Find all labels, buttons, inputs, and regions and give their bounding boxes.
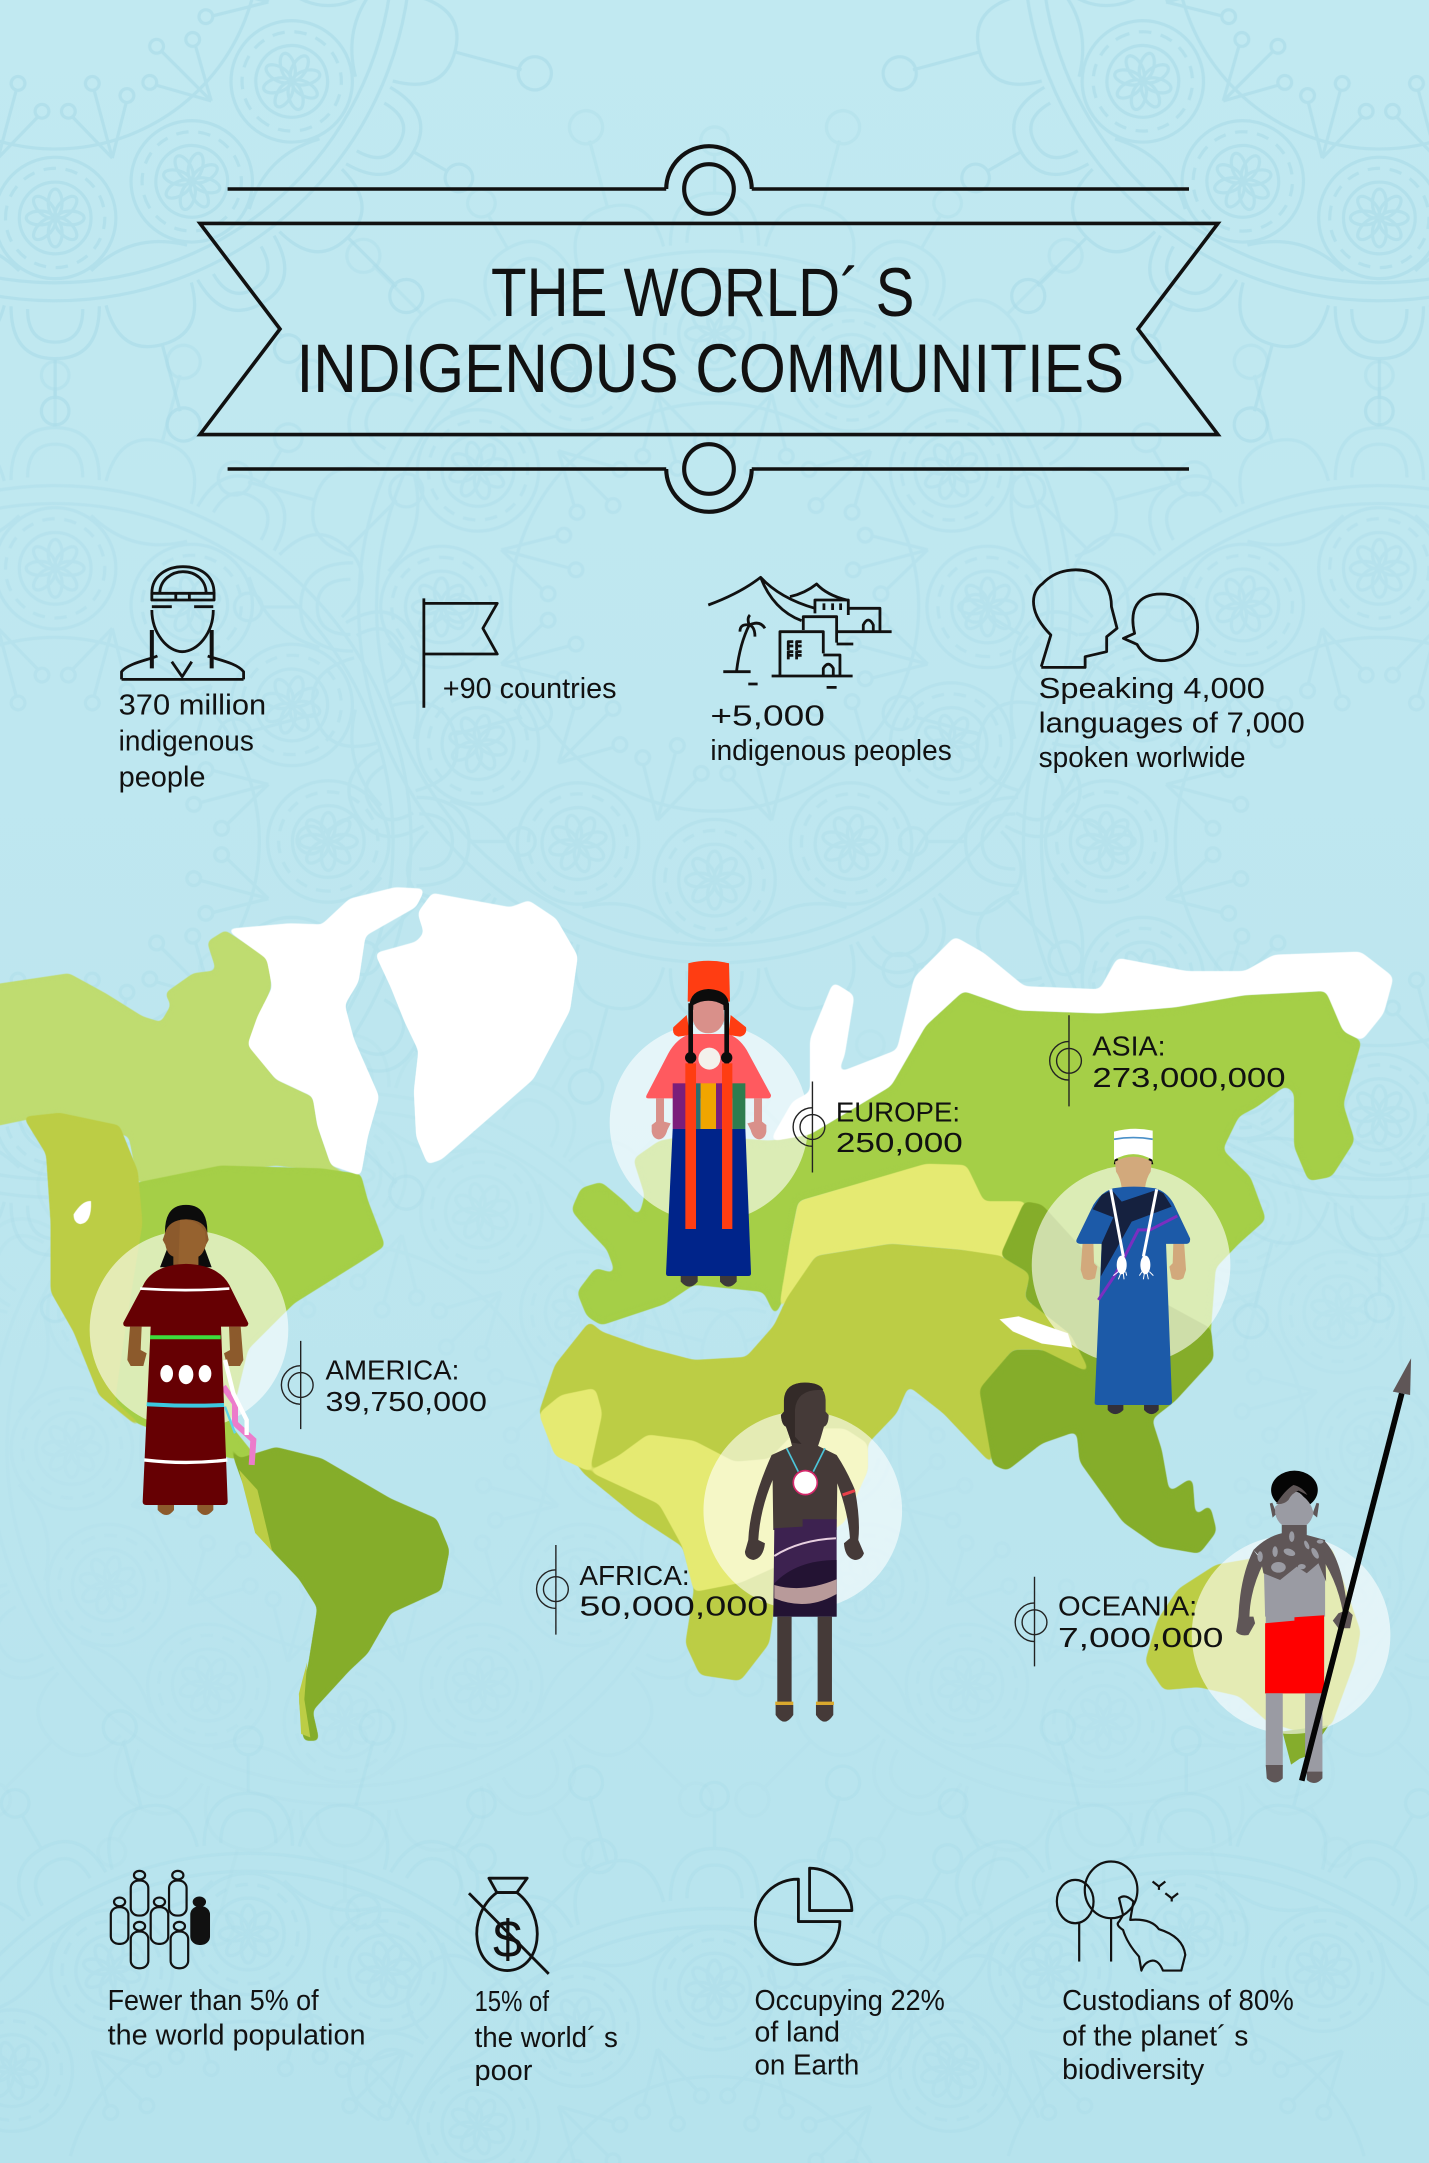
text: languages: Speaking 4,000: [1039, 673, 1265, 705]
map label: Africa: [537, 1545, 768, 1635]
title: THE WORLD´ S: [491, 254, 915, 331]
text: +5,000 peoples: [710, 701, 952, 767]
map label: America: AMERICA:: [326, 1354, 459, 1385]
icon: speaking head and bubble: [1034, 570, 1198, 667]
text: languages: [1039, 673, 1305, 774]
map label: Europe: 250,000: [836, 1127, 963, 1158]
text: occupying 22%: on Earth: [755, 2050, 859, 2082]
stat: poverty share: [469, 1878, 618, 2087]
text: 15% of poor: poor: [474, 2055, 533, 2087]
figure: Europe woman: [646, 961, 771, 1287]
title banner: [200, 146, 1218, 512]
text: custodians of 80%: of the planet´ s: [1062, 2021, 1248, 2053]
icon: indigenous woman: [122, 567, 244, 679]
text: custodians of 80%: biodiversity: [1062, 2054, 1205, 2086]
text: fewer than 5%: [108, 1985, 366, 2051]
icon: pie chart: [755, 1868, 852, 1965]
icon: trees, elephant and birds: [1057, 1862, 1185, 1971]
figure: Asia man: [1076, 1129, 1190, 1414]
text: 370 million: 370 million: [119, 690, 266, 722]
icon: flag: [424, 598, 497, 708]
figure: Oceania man: [1236, 1358, 1411, 1783]
figure: America woman: [123, 1205, 253, 1515]
map: Eurasia, Africa, Australia: [539, 936, 1394, 1765]
world map: [0, 887, 1394, 1765]
stat: countries: [424, 598, 617, 708]
text: occupying 22%: Occupying 22%: [755, 1985, 945, 2017]
text: 370 million: [119, 690, 266, 793]
icon: crossed money bag: [469, 1878, 549, 1974]
map label: Oceania: OCEANIA:: [1058, 1590, 1197, 1621]
title: INDIGENOUS COMMUNITIES: [297, 330, 1124, 407]
text: fewer than 5%: the world population: [108, 2019, 366, 2051]
text: custodians of 80%: [1062, 1985, 1294, 2086]
text: languages: languages of 7,000: [1039, 707, 1305, 739]
text: occupying 22%: [755, 1985, 945, 2082]
text: 370 million: people: [119, 761, 206, 793]
text: +5,000 peoples: indigenous peoples: [710, 735, 952, 767]
stat: biodiversity: [1057, 1862, 1294, 2086]
text: 370 million: indigenous: [119, 725, 254, 757]
map label: Asia: 273,000,000: [1092, 1062, 1286, 1093]
stat: indigenous people: [119, 567, 266, 793]
title: [297, 254, 1124, 407]
map label: Africa: 50,000,000: [579, 1590, 768, 1621]
text: custodians of 80%: Custodians of 80%: [1062, 1985, 1294, 2017]
stat: peoples: [708, 577, 952, 767]
stat: land share: [755, 1868, 945, 2082]
text: +5,000 peoples: +5,000: [710, 701, 825, 733]
map label: Europe: [793, 1082, 963, 1173]
text: +90 countries: +90 countries: [443, 673, 617, 705]
map label: Oceania: 7,000,000: [1058, 1622, 1223, 1653]
map label: Asia: [1050, 1015, 1286, 1106]
text: 15% of poor: [474, 1986, 618, 2087]
map label: America: [281, 1341, 487, 1429]
text: occupying 22%: of land: [755, 2017, 840, 2049]
map label: Oceania: [1015, 1577, 1223, 1666]
map label: Africa: AFRICA:: [579, 1560, 690, 1591]
figure: Africa man: [745, 1383, 864, 1722]
icon: village and palm: [708, 577, 892, 687]
highlight circles: [90, 1024, 1390, 1734]
text: languages: spoken worlwide: [1039, 742, 1246, 774]
icon: group of people: [111, 1871, 209, 1968]
text: fewer than 5%: Fewer than 5% of: [108, 1985, 320, 2017]
text: 15% of poor: 15% of: [474, 1986, 550, 2018]
text: 15% of poor: the world´ s: [474, 2022, 618, 2054]
stat: population share: [108, 1871, 366, 2051]
map: Americas: [0, 887, 578, 1741]
map label: Asia: ASIA:: [1092, 1030, 1166, 1061]
map label: Europe: EUROPE:: [836, 1097, 960, 1128]
icon: crossed money bag: $: [493, 1911, 522, 1969]
map label: America: 39,750,000: [326, 1386, 487, 1417]
stat: languages: [1034, 570, 1305, 774]
